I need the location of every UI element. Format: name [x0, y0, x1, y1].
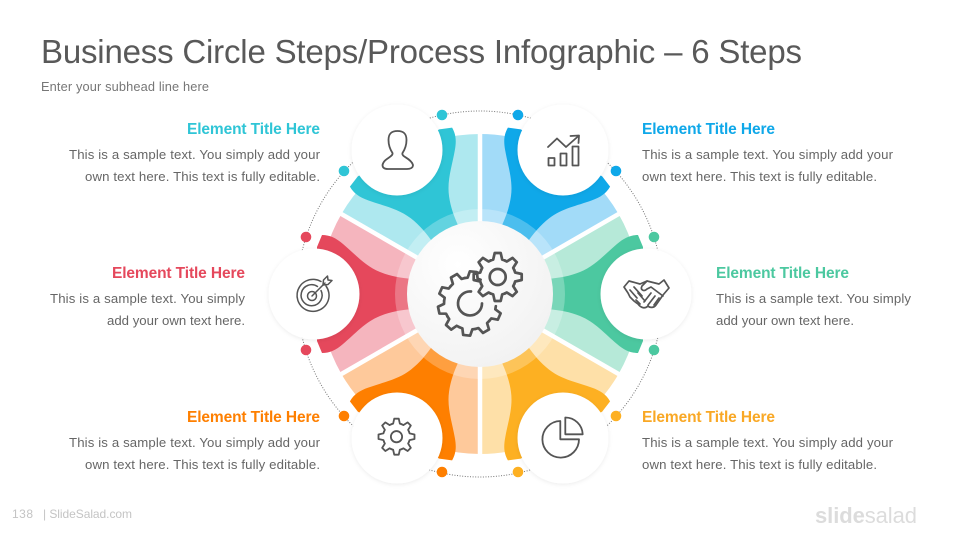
text block: step 6: [50, 265, 245, 328]
icon: person: [382, 131, 413, 169]
text block: step 1: This is a sample text. You simply add your: [69, 147, 321, 162]
text block: step 6: This is a sample text. You simply: [50, 291, 245, 306]
text block: step 2: [642, 121, 894, 184]
text block: step 3: This is a sample text. You simply: [716, 291, 911, 306]
text block: step 6: Element Title Here: [112, 265, 245, 282]
text block: step 1: Element Title Here: [187, 121, 320, 138]
text block: step 3: [716, 265, 911, 328]
subhead: Enter your subhead line here: [41, 79, 209, 94]
text block: step 1: own text here. This text is fully editable.: [85, 169, 320, 184]
central hub with gears icon: [407, 221, 553, 367]
icon: bar chart with arrow: [548, 136, 579, 166]
icon circle: growth chart: [518, 104, 608, 196]
icon: small gear: [474, 253, 522, 301]
connector dots: [301, 110, 659, 477]
icon circle: pie chart: [518, 392, 608, 484]
text block: step 6: add your own text here.: [107, 313, 245, 328]
translucent ring: [395, 209, 565, 379]
icon: pie chart: [542, 418, 583, 458]
icon circle: person: [352, 104, 442, 196]
text block: step 4: own text here. This text is fully editable.: [642, 457, 877, 472]
icon: target with arrow: [297, 276, 332, 311]
dotted outer ring: [297, 111, 663, 477]
text block: step 3: Element Title Here: [716, 265, 849, 282]
logo: slidesalad: [815, 503, 917, 528]
text block: step 4: [642, 409, 894, 472]
text block: step 5: This is a sample text. You simply add your: [69, 435, 321, 450]
text block: step 4: Element Title Here: [642, 409, 775, 426]
text block: step 2: Element Title Here: [642, 121, 775, 138]
icon: gear: [378, 419, 414, 455]
text block: step 2: own text here. This text is fully editable.: [642, 169, 877, 184]
text block: step 5: own text here. This text is fully editable.: [85, 457, 320, 472]
icon circle: handshake: [600, 248, 692, 340]
panel: step 5 orange segment: [329, 254, 549, 475]
icon: handshake: [624, 280, 669, 308]
text block: step 1: [69, 121, 321, 184]
footer page number and site: 138: [12, 507, 33, 521]
panel: step 1 teal segment: [329, 113, 549, 334]
icon: large gear: [437, 271, 502, 336]
panel: step 2 blue segment: [411, 113, 631, 334]
panel: step 3 green segment: [480, 214, 643, 374]
text block: step 5: Element Title Here: [187, 409, 320, 426]
text block: step 2: This is a sample text. You simply add your: [642, 147, 894, 162]
panel: step 4 yellow segment: [411, 254, 631, 475]
footer page number and site: | SlideSalad.com: [43, 507, 132, 521]
icon circle: gear: [352, 392, 442, 484]
title: Business Circle Steps/Process Infographic – 6 Steps: [41, 33, 802, 70]
text block: step 4: This is a sample text. You simply add your: [642, 435, 894, 450]
icon circle: target: [268, 248, 360, 340]
panel: step 6 red segment: [317, 214, 480, 374]
text block: step 3: add your own text here.: [716, 313, 854, 328]
text block: step 5: [69, 409, 321, 472]
